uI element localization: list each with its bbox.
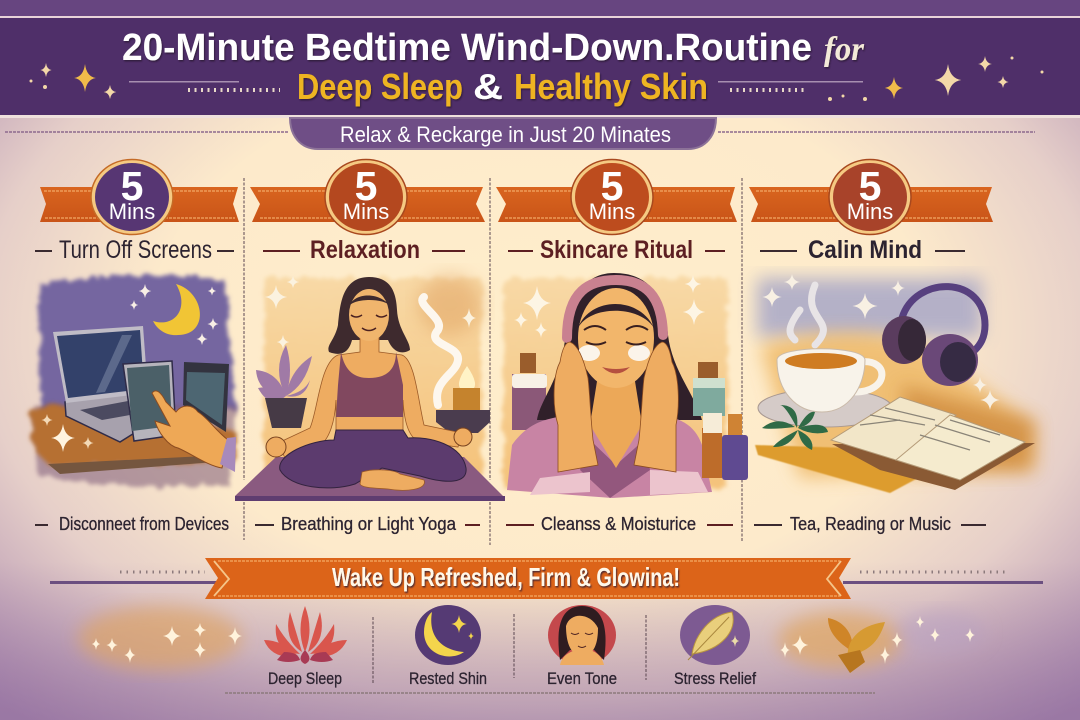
phone (183, 362, 229, 432)
stars (41, 284, 219, 452)
icon: moon badge (415, 605, 481, 665)
steam (790, 285, 823, 345)
hand (152, 391, 228, 468)
illustration: skincare ritual (503, 273, 748, 498)
step 1 badge: 5 mins (40, 160, 239, 234)
step 1 badge: 5 mins: Mins (109, 199, 155, 224)
step 3 badge: 5 mins: 5 (601, 163, 623, 209)
wake-up ribbon: Wake Up Refreshed, Firm & Glowina! (332, 562, 680, 592)
headphones (902, 287, 985, 350)
cup (855, 362, 882, 392)
open book (832, 443, 1035, 490)
illustration: meditation (235, 275, 505, 501)
header banner (0, 0, 1080, 118)
mint leaves (762, 405, 828, 450)
wake-up ribbon (50, 558, 1043, 599)
step 2 badge: 5 mins: 5 (355, 163, 377, 209)
laptop (65, 392, 155, 442)
title line one: 20-Minute Bedtime Wind-Down.Routine (122, 27, 812, 69)
benefit: even tone: Even Tone (547, 669, 617, 688)
benefit: even tone (547, 605, 617, 688)
candle and smoke (422, 297, 458, 405)
step 3 badge: 5 mins (496, 160, 737, 234)
benefit: deep sleep: Deep Sleep (268, 669, 342, 688)
caption 2: Breathing or Light Yoga (281, 514, 457, 534)
benefit: deep sleep (264, 606, 347, 688)
subtitle tab (5, 118, 1035, 149)
hands and forearms (554, 342, 598, 472)
tablet (123, 361, 176, 441)
caption 3: Cleanss & Moisturice (541, 514, 696, 534)
icon: lotus (264, 606, 347, 664)
benefit: stress relief: Stress Relief (674, 669, 756, 688)
woman: hair (328, 277, 410, 354)
icon: face badge (548, 605, 616, 665)
illustration: tea, book and headphones (755, 274, 1035, 493)
bottles left (512, 374, 546, 430)
left sparkle haze (78, 606, 242, 670)
step 3 badge: 5 mins: Mins (589, 199, 635, 224)
plant (256, 345, 312, 401)
title line one: for (824, 31, 865, 68)
step 2 badge: 5 mins: Mins (343, 199, 389, 224)
title line two: Healthy Skin (514, 66, 708, 107)
step 4 heading: Calin Mind (808, 236, 922, 264)
step captions (35, 514, 986, 534)
step 2 badge: 5 mins (250, 160, 485, 234)
icon: feather badge (680, 605, 750, 665)
step 4 badge: 5 mins: Mins (847, 199, 893, 224)
moon (153, 284, 200, 335)
caption 1: Disconneet from Devices (59, 514, 229, 534)
neck (590, 375, 642, 468)
step 4 badge: 5 mins: 5 (859, 163, 881, 209)
hair (537, 273, 702, 420)
saucer (758, 389, 892, 427)
woman: tank top (336, 352, 403, 417)
robe (507, 414, 712, 498)
step 1 heading: Turn Off Screens (59, 236, 212, 264)
step 4 badge: 5 mins (749, 160, 993, 234)
title line two: Deep Sleep (297, 66, 463, 107)
yoga mat (235, 457, 505, 501)
step 1 badge: 5 mins: 5 (121, 163, 143, 209)
subtitle tab: Relax & Reckarge in Just 20 Minates (340, 122, 671, 147)
benefit: stress relief (674, 605, 756, 688)
benefit: rested skin (409, 605, 487, 688)
header sparkles and rules (30, 56, 1044, 101)
column dividers (244, 178, 742, 684)
right sparkle haze with leaves (778, 610, 985, 673)
benefit: rested skin: Rested Shin (409, 669, 487, 688)
face (578, 288, 654, 388)
title line two (297, 66, 708, 107)
caption 4: Tea, Reading or Music (790, 514, 951, 534)
step 3 heading: Skincare Ritual (540, 236, 693, 264)
step 2 heading: Relaxation (310, 236, 420, 264)
woman: leggings (280, 430, 466, 488)
bottles right (698, 362, 718, 380)
illustration: devices under night sky (30, 275, 236, 487)
wooden board (755, 445, 918, 493)
title line two: & (473, 66, 503, 107)
woman: body (278, 335, 462, 458)
bottom dotted rule (225, 692, 875, 694)
